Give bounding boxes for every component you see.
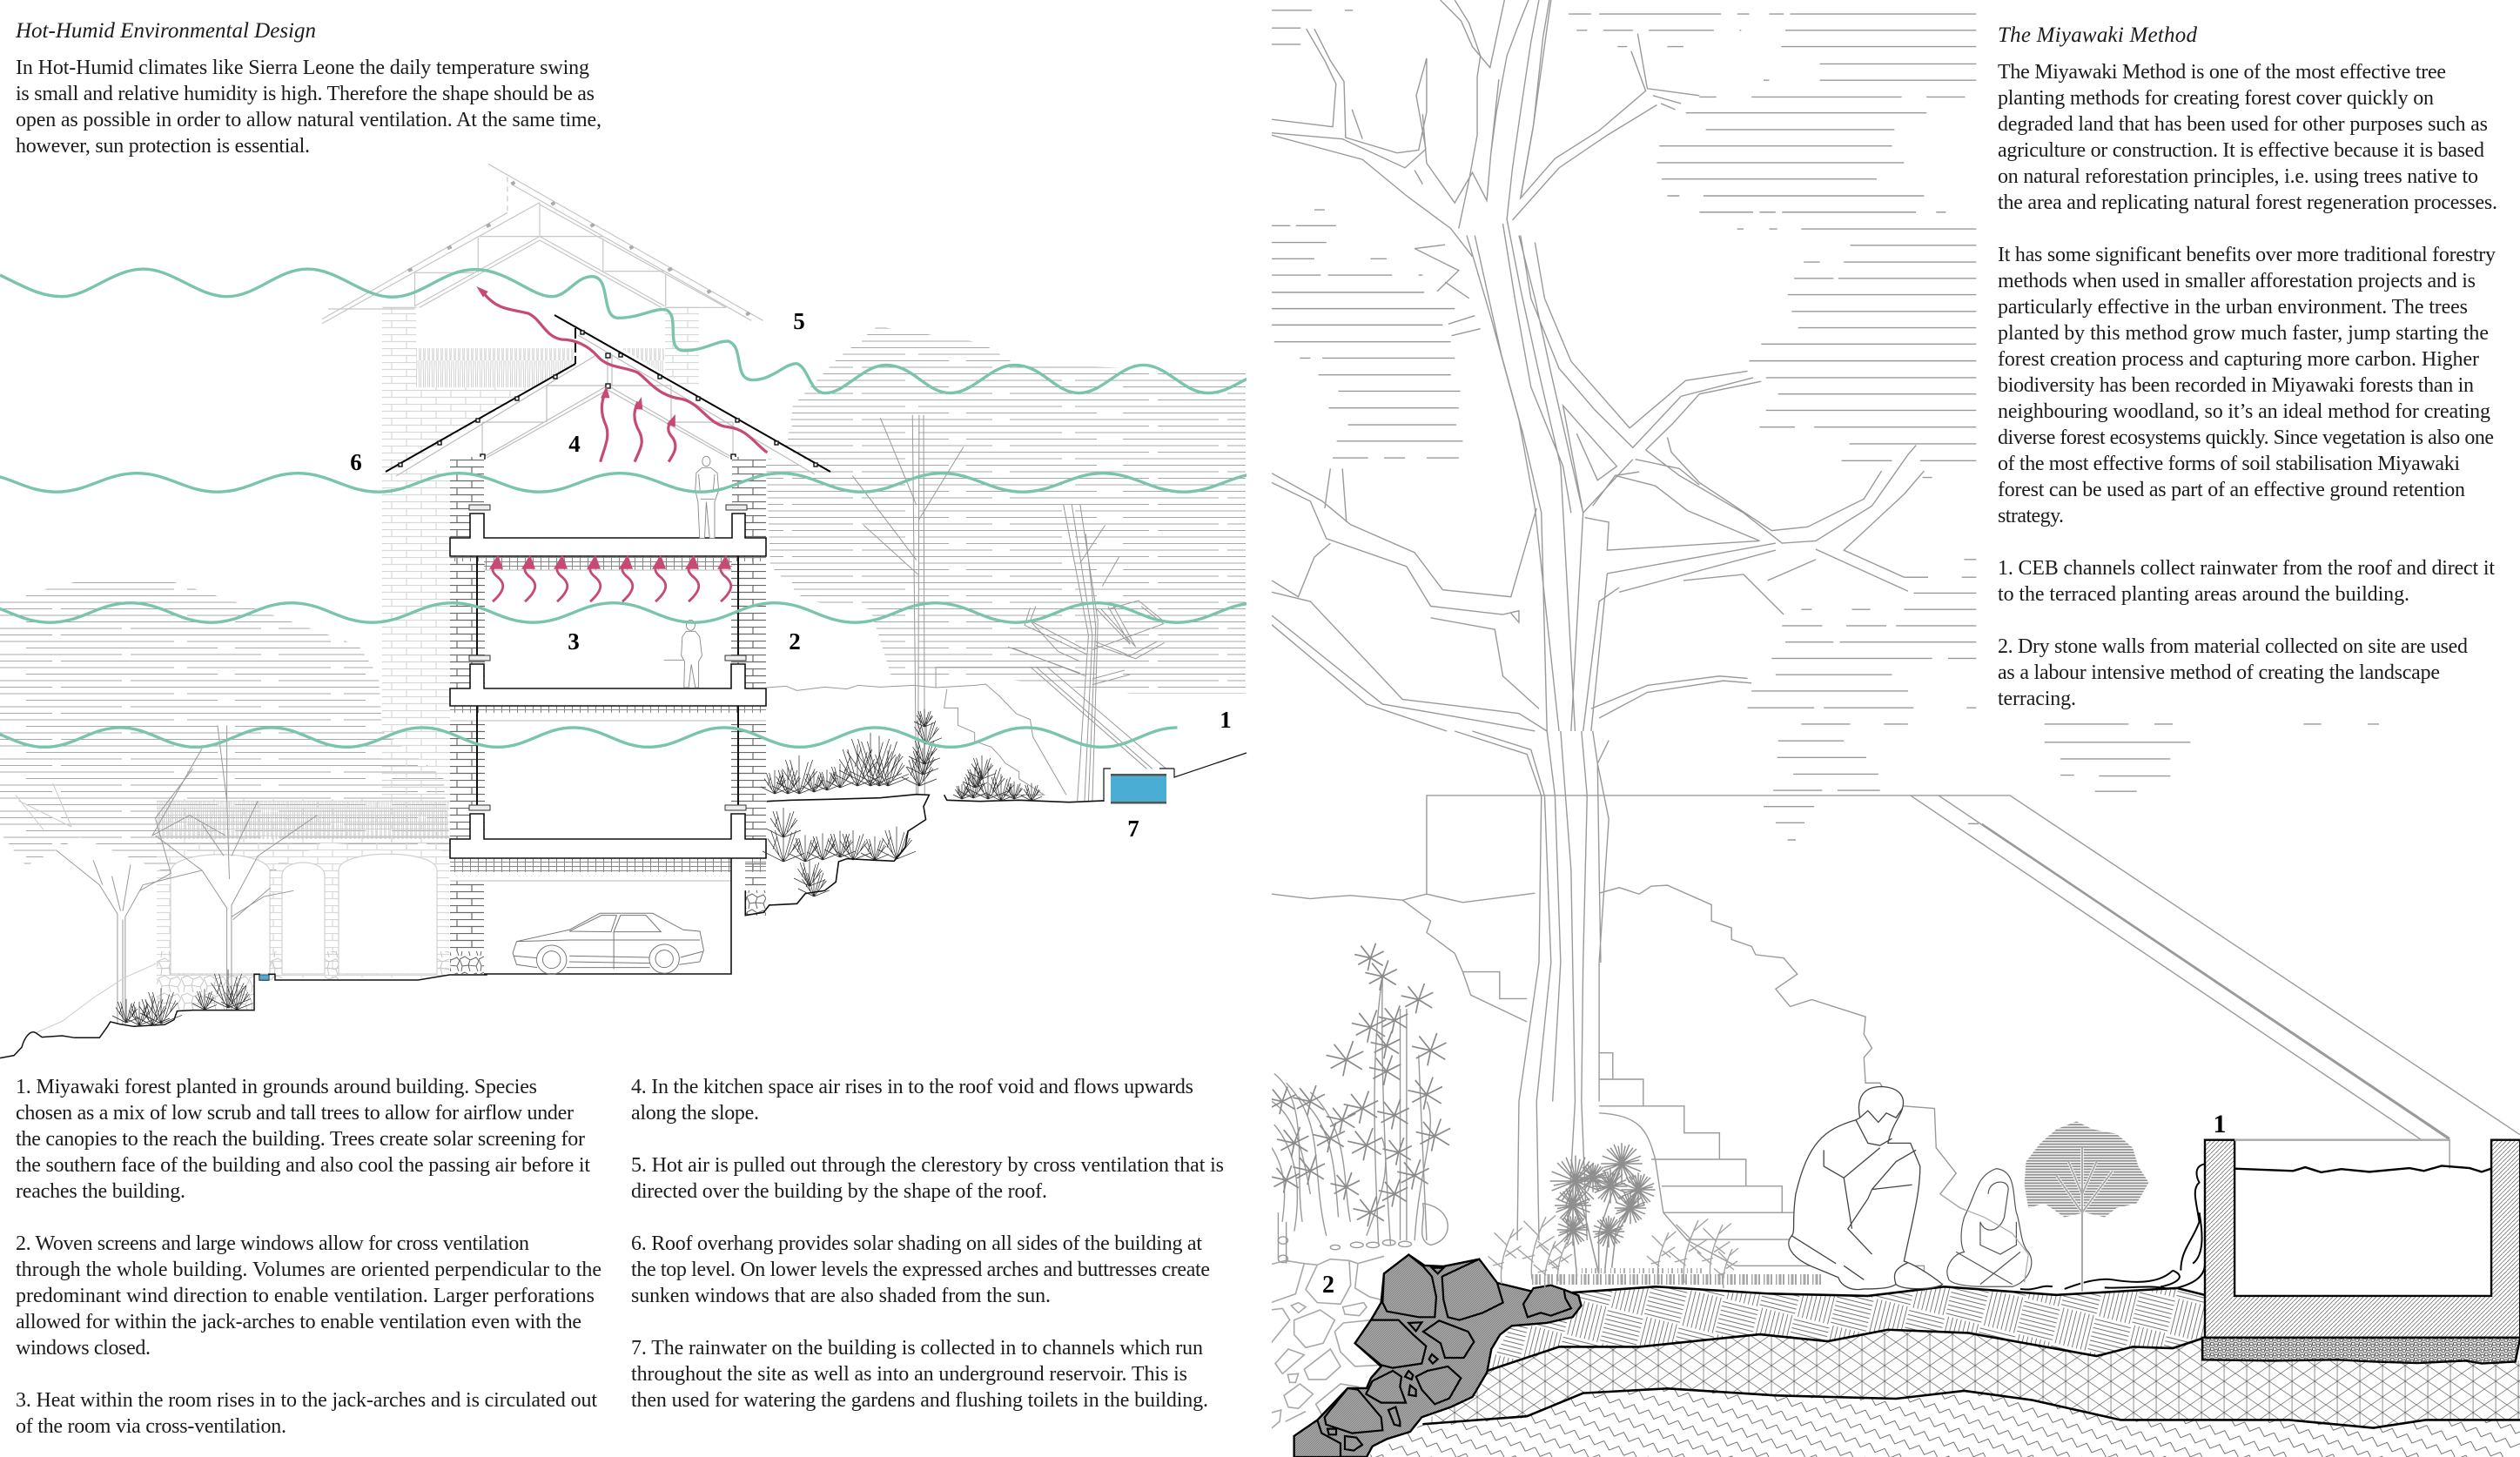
number labels on close-up: 1: [2213, 1110, 2227, 1138]
notes column: items 1 to 3: reaches the building.: [16, 1180, 185, 1203]
dry stone wall in foreground: [1271, 1255, 1582, 1457]
planting and terrain on the right side of the section: [745, 709, 1104, 916]
wind line over the clerestory: [0, 269, 1256, 393]
foliage hatching behind the building: [0, 322, 1247, 888]
paragraph: benefits: strategy.: [1998, 505, 2064, 527]
soil layers: [1367, 1286, 2520, 1457]
paragraph: benefits: It has some significant benefits over more traditional forestry: [1998, 244, 2496, 266]
notes column: items 1 to 3: chosen as a mix of low scrub and tall trees to allow for airflow under: [16, 1102, 574, 1125]
paragraph: benefits: of the most effective forms of soil stabilisation Miyawaki: [1998, 453, 2460, 475]
notes column: items 1 to 3: the canopies to the reach the building. Trees create solar screening for: [16, 1128, 585, 1151]
intro paragraph: open as possible in order to allow natural ventilation. At the same time,: [16, 109, 601, 131]
man crouching: [1789, 1086, 1943, 1290]
notes column: items 4 to 7: along the slope.: [631, 1102, 759, 1125]
number labels on section: 4: [568, 431, 581, 457]
trees on the left of the building: [16, 725, 317, 1033]
heading: hot-humid environmental design: Hot-Humid Environmental Design: [15, 19, 316, 43]
note 2: dry stone walls: as a labour intensive method of creating the landscape: [1998, 661, 2440, 684]
intro paragraph: is small and relative humidity is high. Therefore the shape should be as: [16, 83, 595, 105]
wind line through the lower floor: [0, 728, 1177, 747]
figures: standing and sitting people: [664, 456, 719, 688]
paragraph: benefits: particularly effective in the urban environment. The trees: [1998, 296, 2468, 319]
paragraph: benefits: forest creation process and capturing more carbon. Higher: [1998, 348, 2479, 371]
car in garage: [513, 913, 703, 974]
notes column: items 1 to 3: allowed for within the jack-arches to enable ventilation even with the: [16, 1311, 581, 1333]
paragraph: benefits: biodiversity has been recorded in Miyawaki forests than in: [1998, 374, 2474, 397]
building roof and white interior: [386, 315, 830, 476]
wind line through the middle floor: [0, 603, 1258, 622]
large tree and hatched foliage: [1272, 0, 2379, 731]
notes column: items 4 to 7: directed over the building by the shape of the roof.: [631, 1180, 1047, 1203]
paragraph: benefits: neighbouring woodland, so it’s an ideal method for creating: [1998, 400, 2490, 423]
concrete rainwater channel: [2020, 1140, 2520, 1364]
paragraph: what the method is: on natural reforestation principles, i.e. using trees native to: [1998, 165, 2478, 188]
hot air arrows rising from the middle floor jack-arches: [489, 554, 731, 601]
notes column: items 4 to 7: throughout the site as well as into an underground reservoir. This is: [631, 1363, 1187, 1386]
notes column: items 4 to 7: 4. In the kitchen space air rises in to the roof void and flows upwards: [631, 1076, 1193, 1098]
water tank number 7: [1104, 753, 1247, 804]
notes column: items 4 to 7: 5. Hot air is pulled out through the clerestory by cross ventilation that is: [631, 1154, 1224, 1177]
number labels on section: [350, 308, 1232, 842]
paragraph: benefits: diverse forest ecosystems quickly. Since vegetation is also one: [1998, 426, 2494, 449]
notes column: items 4 to 7: [631, 1076, 1224, 1412]
number labels on section: 6: [350, 449, 362, 475]
intro paragraph: [16, 57, 601, 158]
notes column: items 4 to 7: the top level. On lower levels the expressed arches and buttresses create: [631, 1259, 1210, 1281]
trunk strands: [1422, 0, 1928, 731]
notes column: items 1 to 3: through the whole building. Volumes are oriented perpendicular to the: [16, 1259, 601, 1281]
background terrace, roof line, stairs and lower trunk: [1272, 731, 2520, 1292]
note 1: CEB channels: [1998, 557, 2495, 606]
note 1: CEB channels: to the terraced planting areas around the building.: [1998, 583, 2409, 606]
notes column: items 1 to 3: of the room via cross-ventilation.: [16, 1415, 286, 1438]
note 2: dry stone walls: [1998, 635, 2468, 710]
notes column: items 1 to 3: 3. Heat within the room rises in to the jack-arches and is circulated out: [16, 1389, 597, 1412]
palms and low shrubs: [1488, 1143, 1824, 1288]
heading: the miyawaki method: The Miyawaki Method: [1998, 24, 2197, 47]
paragraph: benefits: methods when used in smaller afforestation projects and is: [1998, 270, 2476, 292]
panel: miyawaki close-up drawing: [1267, 0, 2520, 1457]
intro paragraph: In Hot-Humid climates like Sierra Leone the daily temperature swing: [16, 57, 589, 79]
paragraph: what the method is: The Miyawaki Method is one of the most effective tree: [1998, 61, 2446, 84]
notes column: items 4 to 7: then used for watering the gardens and flushing toilets in the building.: [631, 1389, 1208, 1412]
section walls, floors and windows: [450, 457, 766, 974]
paragraph: what the method is: agriculture or construction. It is effective because it is based: [1998, 139, 2484, 162]
ground line and planting on the left side: [0, 970, 487, 1058]
notes column: items 1 to 3: windows closed.: [16, 1337, 151, 1360]
note 2: dry stone walls: 2. Dry stone walls from material collected on site are used: [1998, 635, 2468, 658]
notes column: items 1 to 3: [16, 1076, 601, 1438]
clerestory upper roof truss: [322, 164, 763, 324]
upper branches: [1272, 0, 1699, 336]
notes column: items 4 to 7: 7. The rainwater on the building is collected in to channels which run: [631, 1337, 1203, 1360]
horizontal foliage hatching: [1272, 10, 2379, 724]
notes column: items 4 to 7: sunken windows that are also shaded from the sun.: [631, 1285, 1051, 1307]
panel: hot-humid environmental design section drawing: [0, 164, 1264, 1058]
notes column: items 1 to 3: 1. Miyawaki forest planted in grounds around building. Species: [16, 1076, 537, 1098]
paragraph: benefits: planted by this method grow much faster, jump starting the: [1998, 322, 2489, 345]
paragraph: what the method is: planting methods for creating forest cover quickly on: [1998, 87, 2434, 110]
note 2: dry stone walls: terracing.: [1998, 688, 2076, 710]
paragraph: what the method is: degraded land that has been used for other purposes such as: [1998, 113, 2488, 136]
number labels on section: 5: [793, 308, 805, 334]
wind line through the top floor: [0, 473, 1264, 492]
small sapling with hatched crown: [2025, 1121, 2148, 1292]
number labels on section: 2: [789, 628, 801, 655]
number labels on section: 7: [1127, 816, 1139, 842]
notes column: items 1 to 3: predominant wind direction to enable ventilation. Larger perforations: [16, 1285, 595, 1307]
notes column: items 1 to 3: the southern face of the building and also cool the passing air before it: [16, 1154, 590, 1177]
intro paragraph: however, sun protection is essential.: [16, 135, 310, 158]
number labels on close-up: 2: [1322, 1272, 1334, 1299]
number labels on section: 3: [568, 628, 580, 655]
trees on the right of the building: [767, 415, 1166, 801]
notes column: items 1 to 3: 2. Woven screens and large windows allow for cross ventilation: [16, 1232, 529, 1255]
paragraph: benefits: [1998, 244, 2496, 527]
notes column: items 4 to 7: 6. Roof overhang provides solar shading on all sides of the building at: [631, 1232, 1202, 1255]
number labels on section: 1: [1220, 707, 1232, 733]
light brick tower and arcade behind section: [157, 307, 699, 1010]
lower left branches: [1272, 468, 1751, 731]
paragraph: what the method is: [1998, 61, 2497, 214]
child sitting cross-legged: [1940, 1169, 2032, 1286]
cross-ventilation wind lines: [0, 269, 1264, 747]
number labels on close-up: [1322, 1110, 2227, 1299]
paragraph: benefits: forest can be used as part of an effective ground retention: [1998, 479, 2465, 501]
hot air arrows in the roof void: [476, 286, 767, 462]
note 1: CEB channels: 1. CEB channels collect rainwater from the roof and direct it: [1998, 557, 2495, 580]
bamboo and reeds at left: [1267, 943, 1450, 1264]
paragraph: what the method is: the area and replicating natural forest regeneration processes.: [1998, 191, 2497, 214]
